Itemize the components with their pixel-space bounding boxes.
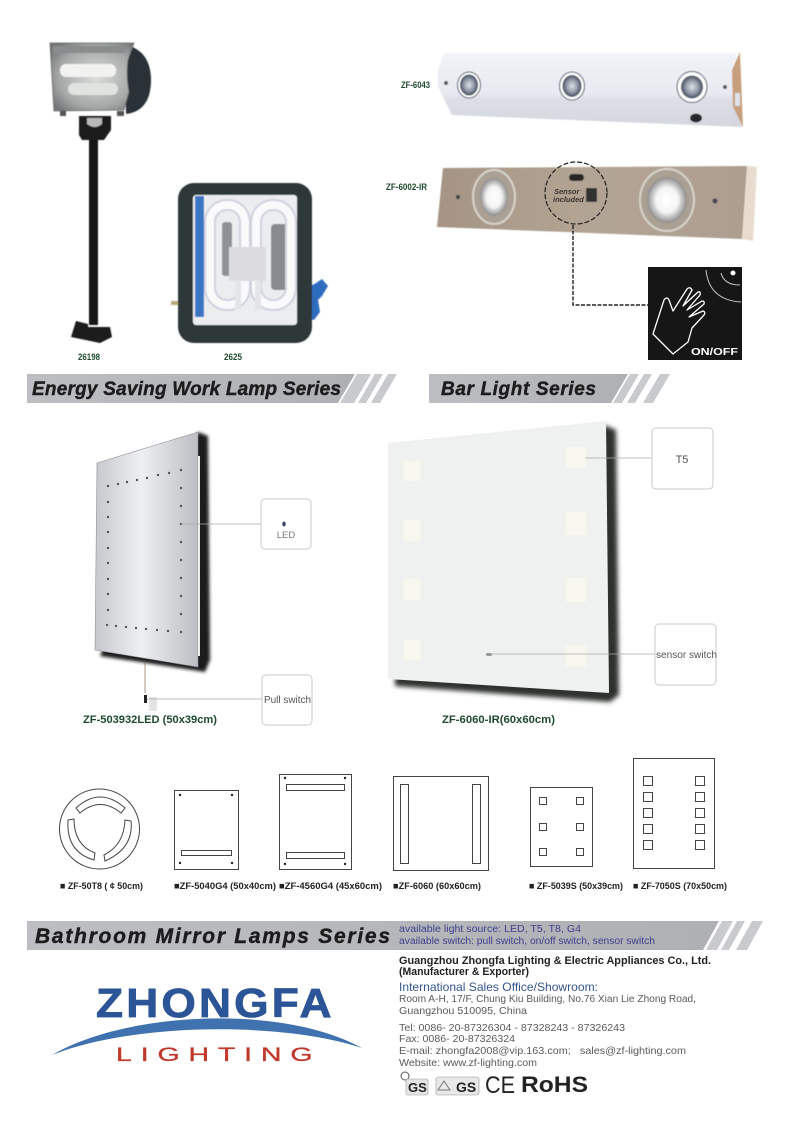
callout: LED: [181, 499, 311, 549]
caption: 26198: 26198: [78, 352, 100, 362]
heading: Bar Light Series: [429, 374, 670, 403]
callout: Pull switch: [147, 675, 312, 725]
company contact block: Tel: 0086- 20-87326304 - 87328243 - 87326243: [399, 1022, 625, 1034]
certification marks: GS, CE, RoHS: GS: [456, 1079, 476, 1095]
callout: T5: T5: [676, 454, 688, 466]
company contact block: Guangzhou 510095, China: [399, 1005, 527, 1017]
company contact block: E-mail: zhongfa2008@vip.163.com; sales@zf-lighting.com: [399, 1045, 686, 1057]
callout: LED: LED: [277, 530, 295, 541]
logo: Zhongfa Lighting: ZHONGFA: [96, 980, 331, 1027]
heading: Bathroom Mirror Lamps Series: Bathroom Mirror Lamps Series: [35, 925, 390, 948]
certification marks: GS, CE, RoHS: CE: [485, 1072, 515, 1099]
company contact block: Website: www.zf-lighting.com: [399, 1057, 537, 1069]
company contact block: Guangzhou Zhongfa Lighting & Electric Appliances Co., Ltd.: [399, 955, 711, 967]
diagram: ZF-5040G4: [174, 790, 238, 870]
caption: 2625: 2625: [224, 352, 242, 362]
product photo: bar light ZF-6002-IR: [437, 166, 757, 241]
certification marks: GS, CE, RoHS: RoHS: [521, 1072, 588, 1097]
availability note: available switch: pull switch, on/off switch, sensor switch: [399, 936, 655, 947]
callout: sensor switch: sensor switch: [656, 650, 717, 661]
heading: Bathroom Mirror Lamps Series: [27, 921, 763, 950]
product photo: floodlight 26198: [50, 43, 151, 343]
icon: hand sensor ON/OFF: ON/OFF: [691, 346, 739, 358]
logo: Zhongfa Lighting: LIGHTING: [116, 1045, 312, 1066]
company contact block: Room A-H, 17/F, Chung Kiu Building, No.76 Xian Lie Zhong Road,: [399, 993, 696, 1005]
model captions row: ■ ZF-50T8 ( ¢ 50cm): [60, 881, 143, 892]
sensor callout with dashed leader: [545, 162, 648, 305]
availability note: available light source: LED, T5, T8, G4: [399, 924, 581, 935]
product photo: work lamp 2625: [171, 183, 328, 343]
model captions row: ■ ZF-7050S (70x50cm): [633, 881, 727, 892]
company contact block: [399, 955, 711, 1069]
caption: ZF-6060-IR: ZF-6060-IR(60x60cm): [442, 714, 555, 726]
model captions row: ■ZF-6060 (60x60cm): [393, 881, 481, 892]
sensor callout with dashed leader: included: [553, 195, 584, 204]
icon: hand sensor ON/OFF: [648, 267, 742, 360]
diagram: ZF-5039S: [530, 788, 592, 866]
heading: Bar Light Series: Bar Light Series: [441, 379, 596, 400]
callout: T5: [585, 428, 713, 489]
company contact block: (Manufacturer & Exporter): [399, 966, 529, 978]
diagram: ZF-4560G4: [280, 774, 352, 870]
callout: sensor switch: [492, 624, 717, 685]
diagram: ZF-7050S: [634, 758, 714, 868]
diagram: ZF-6060: [394, 776, 488, 870]
company contact block: International Sales Office/Showroom:: [399, 980, 598, 994]
logo: Zhongfa Lighting: [52, 980, 362, 1066]
sensor callout with dashed leader: Sensor: [554, 187, 581, 196]
caption: ZF-6002-IR: ZF-6002-IR: [386, 182, 427, 192]
mirror photo: ZF-503932LED: [95, 432, 210, 711]
caption: ZF-6043: ZF-6043: [401, 80, 430, 90]
company contact block: Fax: 0086- 20-87326324: [399, 1033, 515, 1045]
availability note: [399, 924, 655, 947]
model captions row: ■ZF-4560G4 (45x60cm): [279, 881, 382, 892]
callout: Pull switch: Pull switch: [264, 695, 311, 706]
diagram: ZF-50T8 round: [60, 789, 140, 869]
caption: ZF-503932LED: ZF-503932LED (50x39cm): [83, 714, 217, 726]
certification marks: GS, CE, RoHS: GS: [408, 1080, 427, 1095]
mirror photo: ZF-6060-IR: [388, 421, 619, 702]
heading: Energy Saving Work Lamp Series: [27, 374, 397, 403]
certification marks: GS, CE, RoHS: [401, 1072, 588, 1099]
heading: Energy Saving Work Lamp Series: Energy Saving Work Lamp Series: [32, 379, 341, 400]
product photo: bar light ZF-6043: [438, 52, 743, 127]
model captions row: ■ ZF-5039S (50x39cm): [529, 881, 623, 892]
model captions row: [60, 881, 727, 892]
model captions row: ■ZF-5040G4 (50x40cm): [174, 881, 276, 892]
